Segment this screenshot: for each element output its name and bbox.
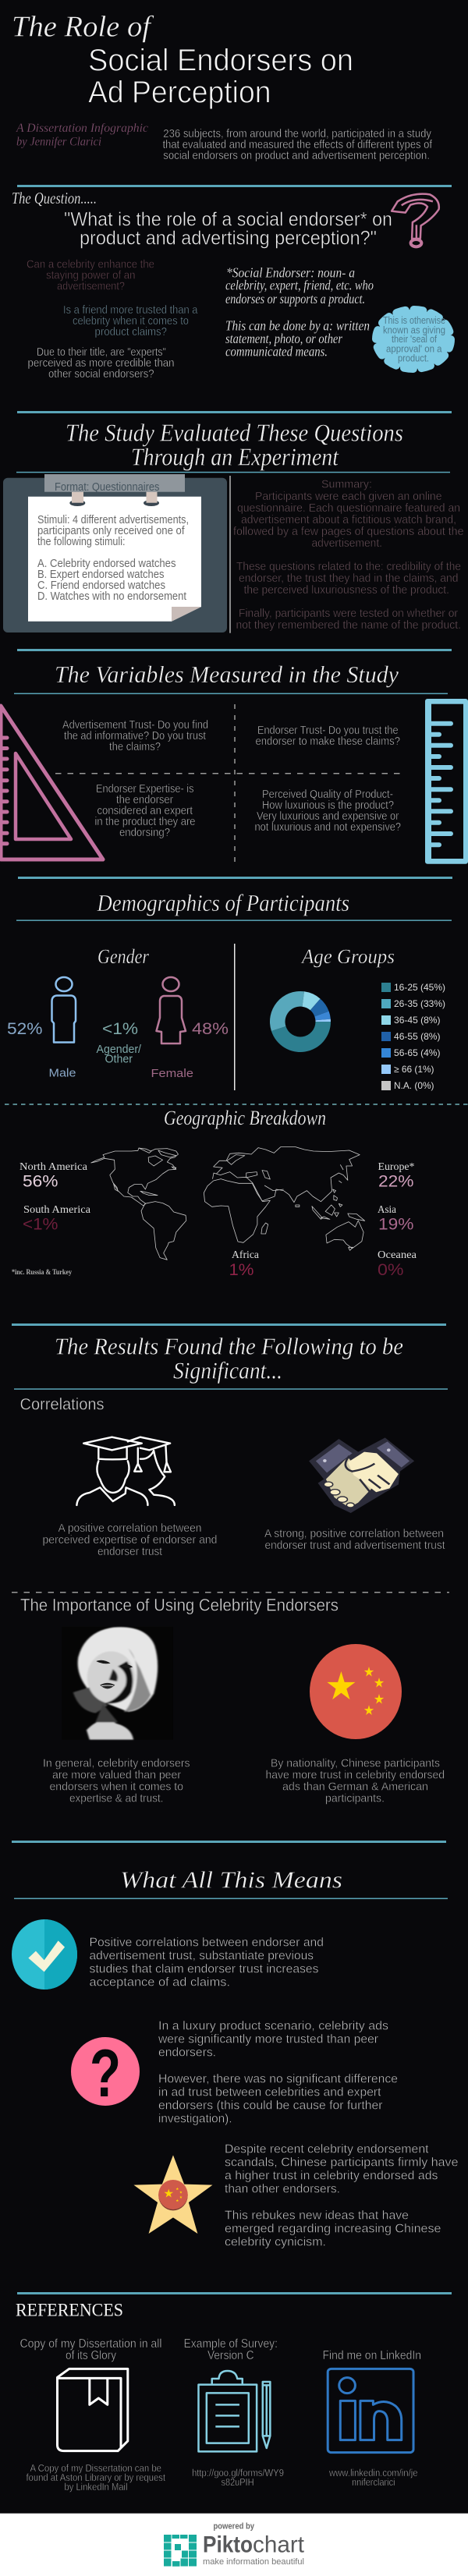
variable: perceived quality: How luxurious is the product? xyxy=(262,799,394,812)
reference: survey title: Example of Survey: xyxy=(184,2337,278,2351)
footer: piktochart xyxy=(0,2514,468,2576)
caption: celebrity value: expertise & ad trust. xyxy=(69,1793,164,1805)
region: north america: 56% xyxy=(23,1173,58,1191)
finding: luxury scenario: endorsers. xyxy=(158,2046,216,2060)
stat: other: <1% xyxy=(102,1020,138,1038)
main question xyxy=(64,208,392,249)
caption: expertise correlation: perceived expertise of endorser and xyxy=(42,1534,217,1547)
reference: survey url xyxy=(192,2468,284,2488)
chart legend: N.A. (0%) xyxy=(394,1080,434,1091)
paper fold xyxy=(172,607,201,622)
stat: female: 48% xyxy=(192,1020,229,1038)
finding: luxury scenario: in ad trust between celebrities and expert xyxy=(158,2086,381,2099)
definition: This can be done by a: written xyxy=(225,317,370,333)
chart legend: ≥ 66 (1%) xyxy=(394,1064,434,1075)
panel: results xyxy=(12,1333,449,1805)
logo mark xyxy=(164,2535,197,2567)
title: line 3: Ad Perception xyxy=(88,76,271,110)
region: south america xyxy=(23,1204,91,1234)
callout: seal of approval: known as giving xyxy=(383,324,445,335)
variable: endorser expertise: Endorser Expertise- is xyxy=(96,783,193,795)
caption: expertise correlation: endorser trust xyxy=(98,1546,162,1558)
format label: Format: Questionnaires xyxy=(55,480,159,494)
callout: seal of approval: product. xyxy=(398,353,429,363)
heading: Geographic Breakdown xyxy=(164,1107,326,1129)
photo: celebrity portrait xyxy=(62,1627,173,1740)
intro paragraph xyxy=(162,128,433,162)
summary text: Participants were each given an online xyxy=(255,490,441,503)
label: agender: Other xyxy=(105,1054,133,1066)
main question: "What is the role of a social endorser* on xyxy=(64,208,392,230)
chart legend xyxy=(381,982,445,1091)
variable: endorser trust: endorser to make these claims? xyxy=(256,735,400,748)
finding: luxury scenario: investigation). xyxy=(158,2113,232,2126)
variable: endorser expertise: endorsing? xyxy=(119,827,170,839)
region: oceania: 0% xyxy=(378,1261,404,1279)
variable: endorser trust: Endorser Trust- Do you trust the xyxy=(257,725,398,737)
intro paragraph: social endorsers on product and advertisement perception. xyxy=(163,150,430,162)
powered by: powered by xyxy=(214,2522,255,2532)
definition: celebrity, expert, friend, etc. who xyxy=(225,278,374,293)
region: south america: <1% xyxy=(23,1216,58,1234)
panel: what all this means xyxy=(12,1866,459,2249)
label: female: Female xyxy=(151,1067,193,1080)
stat: male: 52% xyxy=(7,1020,42,1038)
stimuli text: D. Watches with no endorsement xyxy=(37,590,186,603)
caption: trust correlation: endorser trust and advertisement trust xyxy=(265,1540,445,1552)
callout: seal of approval: approval' on a xyxy=(386,343,442,354)
panel: experiment xyxy=(3,419,463,633)
label: agender xyxy=(97,1044,142,1066)
finding: luxury scenario: were significantly more trusted than peer xyxy=(158,2033,378,2046)
paper sheet xyxy=(28,497,201,622)
caption: nationality: have more trust in celebrity endorsed xyxy=(265,1770,445,1782)
icon: handshake xyxy=(309,1437,414,1513)
icon: star with flag xyxy=(133,2155,212,2234)
title block xyxy=(12,11,433,162)
summary text: Summary: xyxy=(321,478,372,491)
variable: endorser expertise: considered an expert xyxy=(97,805,193,817)
stimuli text: C. Friend endorsed watches xyxy=(37,579,165,592)
summary text: advertisement. xyxy=(312,537,382,550)
logo wordmark xyxy=(203,2532,305,2558)
finding: luxury scenario: endorsers (this could be cause for further xyxy=(158,2099,382,2113)
variable: advertisement trust xyxy=(62,719,208,753)
question label: The Question..... xyxy=(12,189,97,207)
variable: advertisement trust: Advertisement Trust- Do you find xyxy=(62,719,208,732)
finding: chinese participants: emerged regarding increasing Chinese xyxy=(225,2223,441,2236)
heading: The Study Evaluated These Questions xyxy=(66,419,403,447)
reference: linkedin url: www.linkedin.com/in/je xyxy=(328,2468,418,2479)
sub-question: experts: other social endorsers? xyxy=(48,368,154,381)
region: oceania: Oceanea xyxy=(378,1249,417,1261)
reference: survey url: s82uPIH xyxy=(222,2477,254,2488)
sub-question: friend trust: celebrity when it comes to xyxy=(73,315,189,328)
sub-question: staying power: Can a celebrity enhance the xyxy=(27,258,154,271)
icon: male xyxy=(51,977,76,1042)
region: south america: South America xyxy=(23,1204,91,1216)
sub-question: staying power xyxy=(27,258,154,292)
sub-question: staying power: staying power of an xyxy=(46,269,136,282)
callout: seal of approval: their 'seal of xyxy=(392,334,437,345)
stimuli text: B. Expert endorsed watches xyxy=(37,569,164,581)
reference: linkedin url xyxy=(328,2468,418,2488)
panel: variables xyxy=(1,661,468,864)
panel: geographic breakdown xyxy=(12,1107,417,1279)
reference: dissertation title: Copy of my Dissertation in all xyxy=(20,2337,162,2351)
stimuli text xyxy=(37,514,189,603)
summary text: advertisement about a fictitious watch brand, xyxy=(241,513,456,526)
icon: pink question mark xyxy=(392,194,439,246)
icon: china flag xyxy=(310,1644,402,1739)
finding: luxury scenario xyxy=(158,2020,398,2126)
label: agender: Agender/ xyxy=(97,1044,142,1056)
icon: clipboard xyxy=(198,2371,270,2451)
region: asia xyxy=(378,1204,413,1234)
reference: dissertation note: by LinkedIn Mail xyxy=(64,2482,128,2493)
finding: chinese participants: This rebukes new ideas that have xyxy=(225,2209,409,2223)
region: europe xyxy=(378,1161,415,1191)
definition: statement, photo, or other xyxy=(225,331,343,346)
heading xyxy=(55,1333,403,1384)
finding: correlations xyxy=(89,1936,324,1990)
panel: demographics xyxy=(7,889,452,1091)
panel: the question xyxy=(12,189,451,381)
heading: The Variables Measured in the Study xyxy=(55,661,399,688)
world map xyxy=(91,1147,365,1260)
icon: graduates xyxy=(76,1437,175,1505)
region: europe: Europe* xyxy=(378,1161,415,1173)
caption: nationality xyxy=(265,1758,445,1805)
footnote: *inc. Russia & Turkey xyxy=(12,1268,72,1276)
byline: by Jennifer Clarici xyxy=(16,136,101,149)
definition: communicated means. xyxy=(225,344,328,360)
heading: Significant... xyxy=(173,1357,282,1384)
finding: chinese participants: celebrity cynicism. xyxy=(225,2236,326,2249)
finding: luxury scenario: However, there was no significant difference xyxy=(158,2073,398,2086)
reference: linkedin title: Find me on LinkedIn xyxy=(323,2349,421,2362)
heading: REFERENCES xyxy=(16,2300,123,2319)
definition xyxy=(225,264,374,360)
variable: advertisement trust: the ad informative? Do you trust xyxy=(64,730,206,742)
reference: survey url: http://goo.gl/forms/WY9 xyxy=(192,2468,284,2479)
stimuli text: participants only received one of xyxy=(37,525,185,537)
tagline: make information beautiful xyxy=(203,2557,304,2567)
byline: A Dissertation Infographic xyxy=(16,122,148,135)
icon: female xyxy=(156,977,186,1044)
stimuli text: the following stimuli: xyxy=(37,536,125,548)
stimuli text: Stimuli: 4 different advertisements, xyxy=(37,514,189,526)
correlations heading: Correlations xyxy=(20,1395,105,1413)
region: europe: 22% xyxy=(378,1173,413,1191)
intro paragraph: that evaluated and measured the effects of different types of xyxy=(162,139,433,151)
finding: chinese participants xyxy=(225,2143,459,2249)
finding: chinese participants: than other endorsers. xyxy=(225,2183,340,2196)
icon: linkedin xyxy=(328,2369,413,2453)
caption: nationality: ads than German & American xyxy=(282,1781,428,1794)
heading xyxy=(66,419,403,471)
definition: endorses or supports a product. xyxy=(225,291,365,306)
heading: What All This Means xyxy=(120,1866,342,1894)
reference: dissertation title: of its Glory xyxy=(66,2349,116,2362)
finding: chinese participants: a higher trust in celebrity endorsed ads xyxy=(225,2170,438,2183)
importance heading: The Importance of Using Celebrity Endorsers xyxy=(20,1596,339,1615)
variable: endorser expertise: the endorser xyxy=(116,794,173,806)
caption: nationality: By nationality, Chinese participants xyxy=(271,1758,440,1770)
variable: perceived quality xyxy=(254,788,401,834)
chart legend: 16-25 (45%) xyxy=(394,982,445,993)
callout: seal of approval: This is otherwise xyxy=(383,315,445,326)
region: oceania xyxy=(378,1249,417,1279)
reference: linkedin url: nniferclarici xyxy=(352,2477,395,2488)
variable: endorser expertise: in the product they are xyxy=(95,816,195,828)
variable: perceived quality: not luxurious and not expensive? xyxy=(254,821,401,834)
logo wordmark: chart xyxy=(253,2532,305,2558)
reference: dissertation title xyxy=(20,2337,162,2362)
icon: pink question: ? xyxy=(90,2036,121,2111)
reference: survey title: Version C xyxy=(207,2349,254,2362)
icon: check mark xyxy=(12,1919,77,1990)
variable: endorser trust xyxy=(256,725,400,748)
region: north america xyxy=(20,1161,88,1191)
sub-question: friend trust xyxy=(63,304,198,338)
region: asia: Asia xyxy=(378,1204,397,1216)
reference: dissertation note: A Copy of my Dissertation can be xyxy=(30,2463,161,2474)
finding: chinese participants: scandals, Chinese participants firmly have xyxy=(225,2156,459,2170)
sub-question: friend trust: product claims? xyxy=(95,326,167,338)
region: north america: North America xyxy=(20,1161,88,1173)
region: asia: 19% xyxy=(378,1216,413,1234)
finding: correlations: advertisement trust, substantiate previous xyxy=(89,1950,314,1963)
callout: seal of approval xyxy=(376,310,451,369)
logo wordmark: Pikto xyxy=(203,2532,253,2558)
intro paragraph: 236 subjects, from around the world, participated in a study xyxy=(163,128,432,140)
summary text: the perceived luxuriousness of the product. xyxy=(243,583,449,597)
heading: The Results Found the Following to be xyxy=(55,1333,403,1360)
byline xyxy=(16,122,148,149)
panel: references xyxy=(16,2300,421,2493)
chart legend: 56-65 (4%) xyxy=(394,1047,440,1058)
format card xyxy=(3,474,227,632)
icon: set square xyxy=(1,706,103,859)
heading: Through an Experiment xyxy=(131,443,339,471)
summary text xyxy=(233,478,463,632)
finding: chinese participants: Despite recent celebrity endorsement xyxy=(225,2143,429,2156)
finding: correlations: studies that claim endorser trust increases xyxy=(89,1963,319,1976)
caption: celebrity value: endorsers when it comes to xyxy=(50,1781,183,1794)
chart legend: 46-55 (8%) xyxy=(394,1031,440,1042)
title: line 2: Social Endorsers on xyxy=(88,44,353,78)
icon: book xyxy=(57,2369,128,2451)
finding: correlations: Positive correlations between endorser and xyxy=(89,1936,324,1950)
icon: pink question xyxy=(71,2036,140,2111)
label: male: Male xyxy=(48,1067,76,1080)
variable: endorser expertise xyxy=(95,783,195,839)
reference: dissertation note xyxy=(27,2463,165,2493)
title: script line: The Role of xyxy=(12,11,154,44)
variable: advertisement trust: the claims? xyxy=(109,741,161,753)
sub-question: experts: Due to their title, are "experts" xyxy=(37,346,166,359)
caption: celebrity value: In general, celebrity endorsers xyxy=(43,1758,190,1770)
caption: expertise correlation xyxy=(42,1522,217,1558)
caption: celebrity value xyxy=(43,1758,190,1805)
caption: expertise correlation: A positive correlation between xyxy=(58,1522,201,1535)
finding: luxury scenario: In a luxury product scenario, celebrity ads xyxy=(158,2020,388,2033)
region: africa: Africa xyxy=(232,1249,260,1261)
caption: trust correlation: A strong, positive correlation between xyxy=(264,1528,444,1540)
gender heading: Gender xyxy=(98,945,150,968)
variable: perceived quality: Perceived Quality of Product- xyxy=(262,788,393,801)
icon: ruler xyxy=(425,699,468,864)
caption: trust correlation xyxy=(264,1528,445,1552)
heading: Demographics of Participants xyxy=(97,889,349,916)
sub-question: experts xyxy=(28,346,175,381)
chart legend: 26-35 (33%) xyxy=(394,998,445,1009)
donut chart xyxy=(270,991,331,1052)
format tab xyxy=(44,474,185,492)
region: africa: 1% xyxy=(229,1261,254,1279)
age heading: Age Groups xyxy=(300,945,395,968)
sub-question: staying power: advertisement? xyxy=(57,280,125,292)
definition: *Social Endorser: noun- a xyxy=(226,264,355,280)
sub-question: friend trust: Is a friend more trusted than a xyxy=(63,304,198,317)
sub-question: experts: perceived as more credible than xyxy=(28,357,175,370)
variable: perceived quality: Very luxurious and expensive or xyxy=(257,810,399,823)
paper clips xyxy=(69,492,159,506)
chart legend: 36-45 (8%) xyxy=(394,1015,440,1026)
caption: celebrity value: are more valued than peer xyxy=(52,1770,181,1782)
stimuli text: A. Celebrity endorsed watches xyxy=(37,558,176,570)
main question: product and advertising perception?" xyxy=(80,227,377,249)
region: africa xyxy=(229,1249,260,1279)
reference: survey title xyxy=(184,2337,278,2362)
reference: dissertation note: found at Aston Library or by request xyxy=(27,2472,165,2483)
caption: nationality: participants. xyxy=(325,1793,385,1805)
finding: correlations: acceptance of ad claims. xyxy=(89,1976,230,1990)
